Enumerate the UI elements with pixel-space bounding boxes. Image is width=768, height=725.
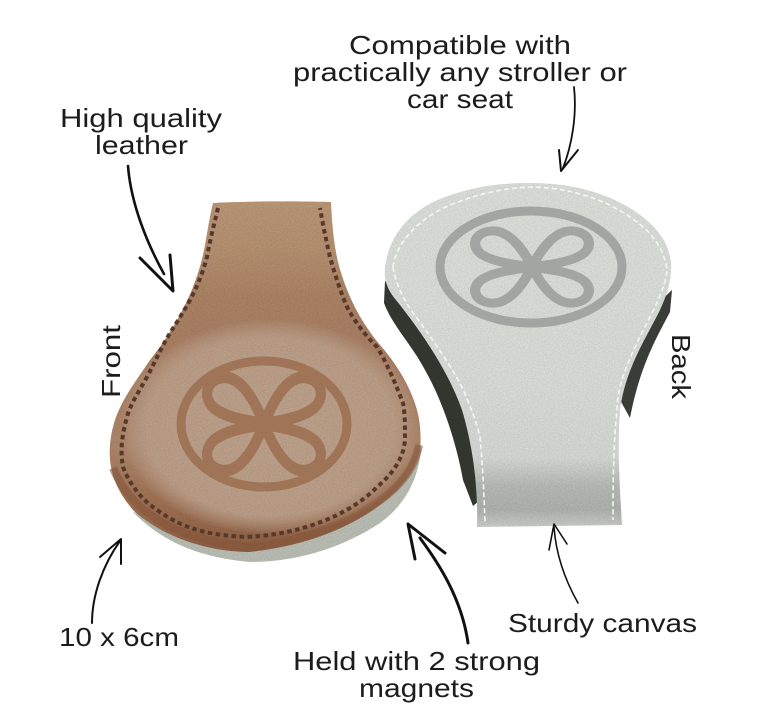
label: compatibility: Compatible with (349, 30, 571, 60)
label: high quality leather: High quality (60, 103, 222, 133)
arrow: leather (128, 166, 173, 291)
arrow: compatibility (559, 87, 578, 171)
label: compatibility: practically any stroller or (293, 57, 627, 87)
label: compatibility (293, 30, 627, 114)
panel: front of strap (leather) (110, 201, 421, 562)
dark magnet edge, left and right (384, 281, 480, 506)
label: size: 10 x 6cm (59, 622, 179, 652)
arrow: canvas (549, 524, 578, 603)
rim shadow (113, 445, 419, 546)
label: high quality leather: leather (95, 130, 188, 160)
label: back: Back (666, 334, 696, 400)
canvas underside (133, 440, 421, 562)
leather stitching (122, 208, 405, 537)
arrow: size (92, 539, 121, 623)
label: compatibility: car seat (407, 84, 514, 114)
padded disc (120, 319, 420, 535)
label: magnets: Held with 2 strong (293, 646, 540, 676)
label: front: Front (96, 324, 126, 398)
arrow: magnets (408, 524, 468, 643)
label: sturdy canvas: Sturdy canvas (508, 608, 697, 638)
printed logo (440, 211, 622, 323)
label: magnets: magnets (359, 673, 474, 703)
canvas body (385, 183, 671, 527)
embossed logo (181, 361, 347, 487)
panel: back of strap (canvas) (384, 183, 672, 527)
label: high quality leather (60, 103, 222, 160)
leather body (110, 201, 421, 552)
label: magnets (293, 646, 540, 703)
white stitching (393, 187, 667, 523)
